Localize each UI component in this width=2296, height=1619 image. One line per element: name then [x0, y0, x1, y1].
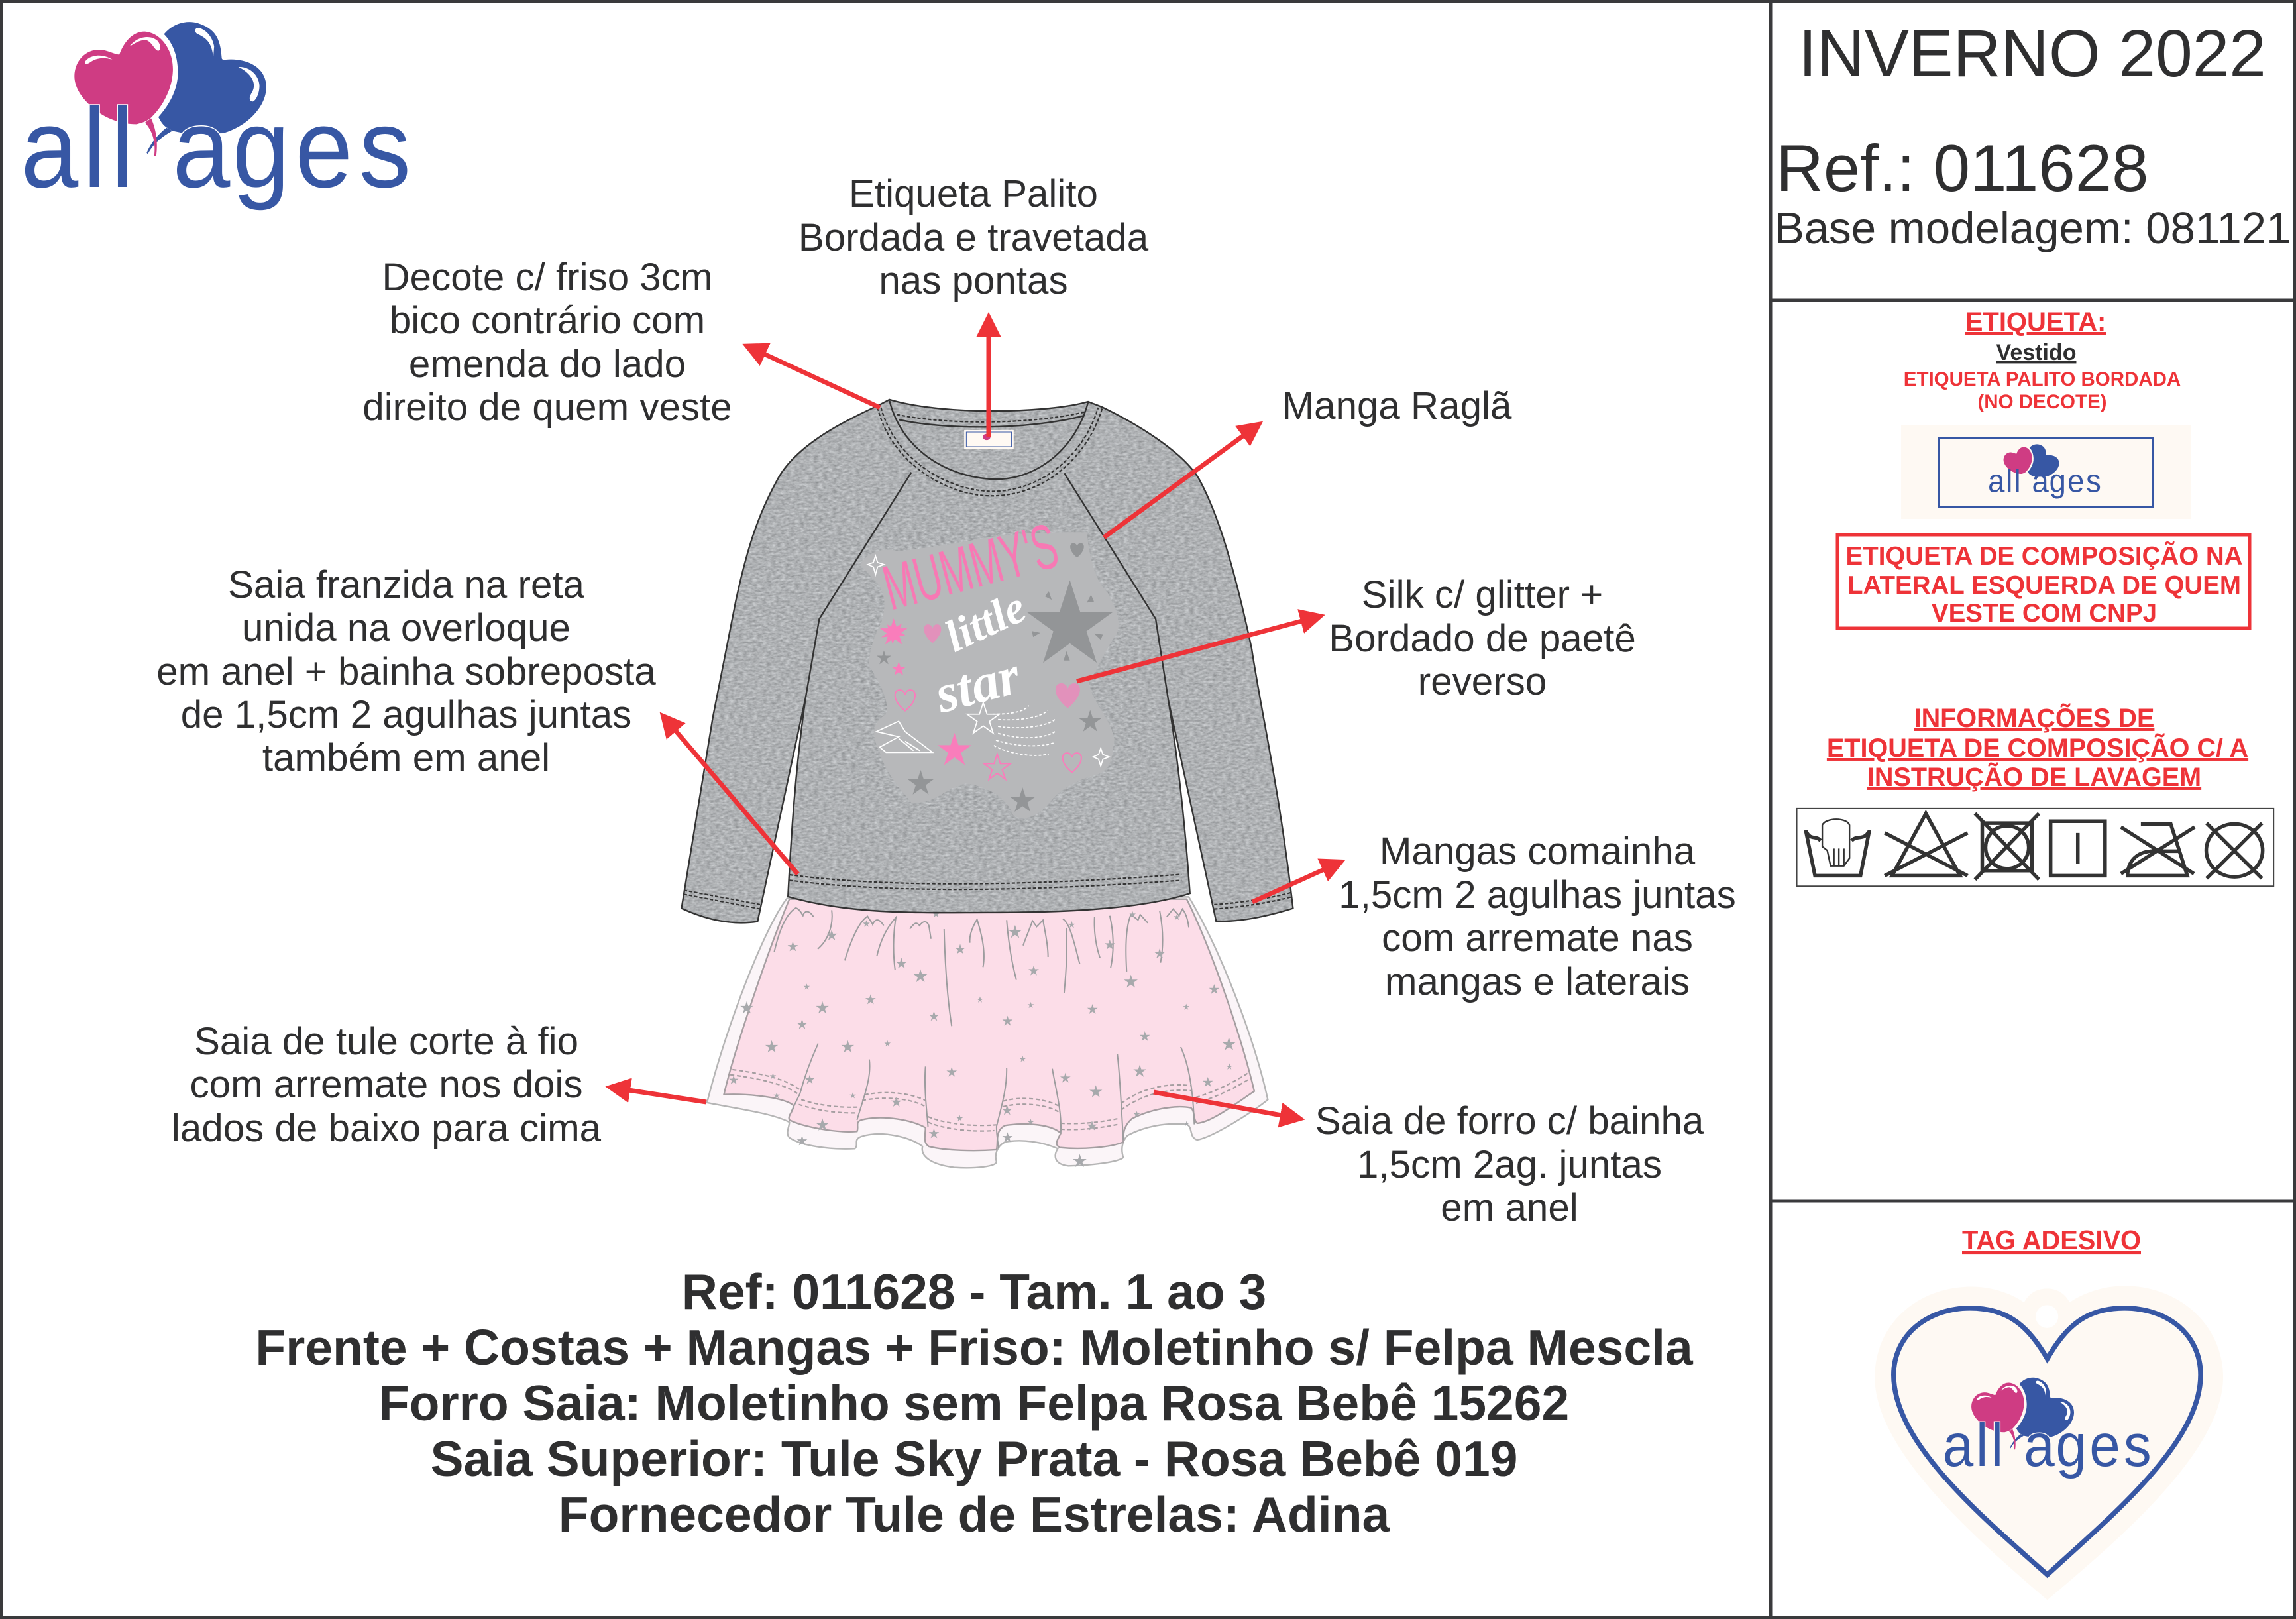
logo: all ages: all ages — [21, 85, 411, 211]
hem stitching — [730, 1070, 1248, 1131]
callout: mangas comainha: mangas e laterais — [1385, 960, 1690, 1003]
print headline: MUMMY'S: MUMMY'S — [876, 510, 1066, 624]
icon: no dry clean — [2207, 823, 2263, 879]
callout: decote: Decote c/ friso 3cm — [382, 256, 712, 299]
care symbols — [1797, 809, 2273, 886]
outer tulle layer — [707, 897, 1268, 1168]
text: etiqueta palito bordada: ETIQUETA PALITO BORDADA — [1904, 368, 2181, 390]
callout: mangas comainha: com arremate nas — [1382, 917, 1693, 960]
callout: silk: Silk c/ glitter + — [1362, 573, 1603, 616]
tag logo — [1943, 1378, 2152, 1479]
callout: saia de tule: lados de baixo para cima — [172, 1107, 602, 1150]
print pink stars and hearts — [878, 618, 1081, 779]
text: etiqueta palito bordada: (NO DECOTE) — [1977, 391, 2107, 413]
small logo: all ages — [1988, 463, 2101, 500]
heading: etiqueta: ETIQUETA: — [1965, 307, 2106, 337]
composition label box: VESTE COM CNPJ — [1932, 599, 2157, 628]
callout: decote: emenda do lado — [409, 343, 686, 386]
callout: saia franzida: em anel + bainha sobreposta — [156, 650, 656, 693]
product specification block: Forro Saia: Moletinho sem Felpa Rosa Bebê 15262 — [379, 1375, 1569, 1431]
header: season: INVERNO 2022 — [1798, 17, 2266, 91]
callout: decote: direito de quem veste — [362, 386, 732, 429]
icon: hand wash — [1806, 819, 1869, 875]
arrow: saia de tule — [629, 1090, 706, 1102]
tag logo: all ages — [1943, 1412, 2152, 1479]
sweater illustration — [681, 400, 1293, 922]
icon: no tumble dry — [1975, 814, 2039, 879]
arrow: decote — [764, 354, 880, 408]
icon: no bleach — [1885, 814, 1967, 875]
callout: saia de forro: em anel — [1441, 1186, 1578, 1229]
arrow: saia de forro — [1154, 1092, 1282, 1115]
callout: etiqueta palito: Etiqueta Palito — [849, 172, 1098, 215]
arrow: mangas comainha — [1252, 869, 1324, 902]
icon: line dry — [2051, 821, 2105, 875]
print script: little: little — [937, 581, 1033, 662]
callout: manga raglã: Manga Raglã — [1282, 384, 1512, 427]
product specification block: Saia Superior: Tule Sky Prata - Rosa Bebê 019 — [431, 1431, 1517, 1486]
tulle star print — [729, 911, 1236, 1167]
silk print patch — [861, 532, 1119, 818]
product specification block: Fornecedor Tule de Estrelas: Adina — [559, 1486, 1391, 1542]
arrow: saia franzida — [675, 730, 798, 874]
callout: decote: bico contrário com — [390, 299, 705, 342]
print script: star: star — [928, 644, 1027, 724]
heading: informações de etiqueta: INSTRUÇÃO DE LAVAGEM — [1867, 763, 2201, 792]
arrow: etiqueta palito — [986, 336, 991, 437]
sweater hem and cuff stitching — [684, 874, 1291, 909]
small logo — [1988, 444, 2101, 500]
icon: no iron — [2121, 824, 2195, 875]
print gray stars and heart — [877, 543, 1113, 812]
callout: saia de tule: com arremate nos dois — [190, 1063, 582, 1106]
sweater outline and seams — [681, 400, 1293, 922]
heading: informações de etiqueta: ETIQUETA DE COMPOSIÇÃO C/ A — [1827, 734, 2248, 763]
heart sticker tag — [1875, 1286, 2223, 1600]
composition label box — [1837, 535, 2250, 628]
composition label box: LATERAL ESQUERDA DE QUEM — [1847, 571, 2241, 600]
header: base modelagem: Base modelagem: 081121 — [1775, 203, 2291, 253]
callout: silk: reverso — [1418, 660, 1547, 703]
callout: saia franzida: de 1,5cm 2 agulhas juntas — [181, 693, 631, 736]
callout: saia franzida: unida na overloque — [242, 606, 571, 649]
heading: informações de etiqueta: INFORMAÇÕES DE — [1914, 704, 2154, 733]
callout: saia de forro: Saia de forro c/ bainha — [1315, 1099, 1704, 1143]
arrow: manga raglã — [1104, 435, 1244, 537]
collar stitching — [877, 408, 1103, 496]
product specification block: Ref: 011628 - Tam. 1 ao 3 — [682, 1264, 1266, 1319]
pink lining layer — [724, 899, 1254, 1150]
arrow: silk — [1077, 621, 1302, 681]
callout: saia franzida: Saia franzida na reta — [228, 563, 585, 606]
callout: saia franzida: também em anel — [262, 736, 550, 779]
product specification block: Frente + Costas + Mangas + Friso: Moletinho s/ Felpa Mescla — [255, 1319, 1694, 1375]
sweater fill — [681, 400, 1293, 922]
print white doodles — [868, 556, 1109, 766]
text: vestido: Vestido — [1996, 340, 2076, 365]
composition label box: ETIQUETA DE COMPOSIÇÃO NA — [1846, 541, 2242, 571]
logo: all ages — [21, 22, 411, 211]
callout: etiqueta palito: nas pontas — [879, 259, 1068, 302]
callout: saia de forro: 1,5cm 2ag. juntas — [1357, 1143, 1662, 1186]
callout: silk: Bordado de paetê — [1329, 617, 1636, 660]
skirt illustration — [707, 897, 1268, 1168]
callout: saia de tule: Saia de tule corte à fio — [194, 1020, 578, 1063]
neck label — [964, 430, 1014, 449]
callout: mangas comainha: 1,5cm 2 agulhas juntas — [1339, 873, 1736, 917]
neck label artwork — [1901, 425, 2191, 519]
heading: tag adesivo: TAG ADESIVO — [1962, 1225, 2141, 1255]
header: reference: Ref.: 011628 — [1776, 132, 2148, 205]
gather fold lines — [774, 908, 1194, 1148]
callout: etiqueta palito: Bordada e travetada — [798, 216, 1149, 259]
callout: mangas comainha: Mangas comainha — [1380, 830, 1696, 873]
